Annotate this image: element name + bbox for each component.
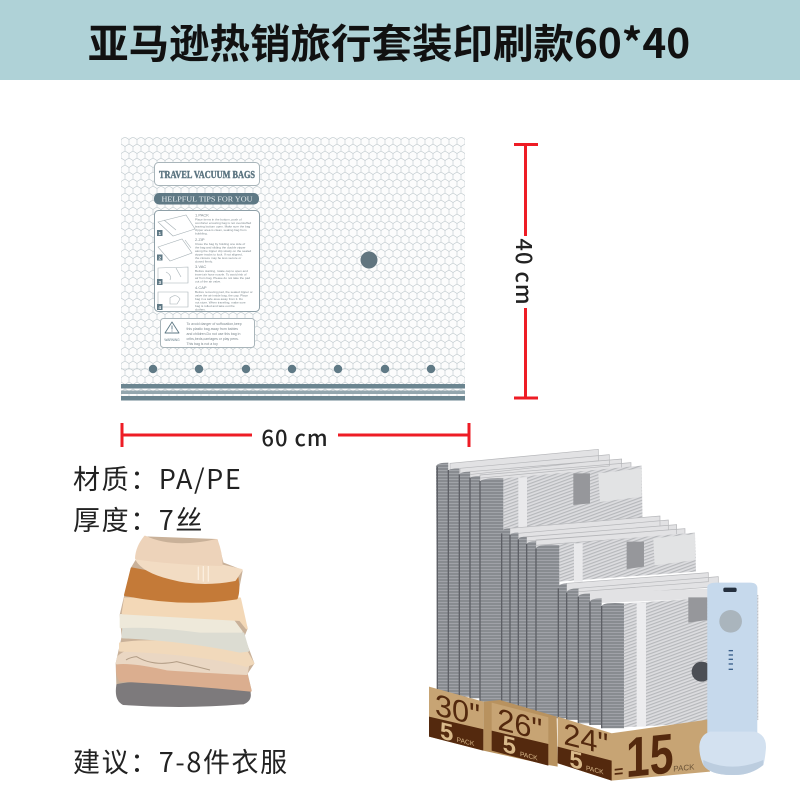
kraft box: 30 inch: 5 — [440, 718, 453, 748]
step number badges: 1 — [158, 231, 161, 236]
kraft box: 24 inch with total: 5 — [569, 746, 583, 776]
icon: warning triangle: WARNING — [164, 338, 180, 342]
step text: Place items in the bottom, push of — [195, 218, 242, 222]
step text: the bag and sliding the double zipper — [195, 246, 246, 250]
warning box — [160, 318, 254, 348]
step text: clothes. — [195, 308, 206, 312]
stack: 30 inch bags — [436, 449, 643, 702]
step markers row — [121, 365, 465, 373]
warning box: To avoid danger of suffocation,keep — [186, 322, 242, 326]
warning box: This bag is not a toy — [186, 342, 218, 346]
thickness text: 厚度：7丝 — [73, 499, 204, 538]
step text: bubbling. — [195, 232, 208, 236]
kraft box: 24 inch with total: PACK — [586, 765, 604, 776]
step text: out of the air valve. — [195, 280, 221, 284]
warning box: this plastic bag away from babies — [186, 327, 238, 331]
step text: 1.PACK — [195, 212, 209, 218]
step text: Close the bag by holding one side of — [195, 242, 245, 246]
step text: leaving bottom open. Make sure the bag — [195, 224, 250, 228]
valve — [360, 252, 378, 268]
vacuum bag printed artwork — [121, 137, 465, 400]
step number badges — [157, 230, 162, 310]
step number badges: 4 — [158, 305, 161, 310]
kraft box: 24 inch with total: 24" — [563, 716, 608, 762]
step text: Before starting, rotate cap to open and — [195, 269, 248, 273]
kraft box: 26 inch: 26" — [497, 702, 542, 747]
kraft box: 26 inch: PACK — [520, 751, 538, 762]
helpful tips banner: HELPFUL TIPS FOR YOU — [162, 194, 253, 204]
step text: not store. When traveling, make sure — [195, 300, 246, 304]
step text: air from bag, Please do not take the pad — [195, 276, 250, 280]
warning box: and children.Do not use this bag in — [186, 332, 240, 336]
stack: 24 inch bags — [558, 573, 758, 728]
kraft box: 30 inch: 30" — [435, 687, 480, 733]
height dimension: 40 cm — [509, 144, 541, 398]
step text: 4.CAP — [195, 285, 207, 290]
step text: bag in a safe area away from it. Do — [195, 297, 243, 301]
step text: valve the air inside bag, the cap. Place — [195, 294, 248, 298]
step text: zipper tracks to lock. If not aligned, — [195, 252, 243, 256]
instruction steps panel — [154, 210, 260, 312]
warning box: cribs,beds,carriages or play pens. — [186, 337, 239, 341]
bottom stripes — [121, 384, 465, 400]
advice text: 建议：7-8件衣服 — [73, 741, 289, 780]
step number badges: 2 — [158, 256, 161, 260]
header banner — [0, 0, 800, 80]
step text — [195, 212, 253, 312]
step text: along the zipper clip slowly on the sealed — [195, 249, 252, 253]
kraft box: 24 inch with total: = — [614, 762, 623, 781]
step text: 3.VAC — [195, 264, 206, 269]
kraft box: 26 inch — [492, 702, 548, 766]
folded clothes stack — [117, 537, 253, 706]
kraft box: 24 inch with total: PACK — [673, 762, 695, 774]
material text: 材质：PA/PE — [73, 458, 242, 497]
step text: Before removing pad, the sealed zipper or — [195, 290, 253, 294]
bag title box: TRAVEL VACUUM BAGS — [159, 170, 255, 181]
step text: insert air hose nozzle. To avoid risk of — [195, 272, 247, 276]
handheld vacuum pump — [699, 583, 766, 775]
product photo: bag sets and pump — [429, 449, 766, 790]
kraft box: 26 inch: 5 — [503, 731, 516, 761]
bag title box — [154, 162, 260, 186]
step text: the closure may be less secure or — [195, 256, 241, 260]
kraft box: 30 inch: PACK — [457, 737, 475, 748]
kraft box: 30 inch — [429, 687, 483, 751]
title: 亚马逊热销旅行套装印刷款60*40 — [88, 11, 690, 70]
stack: 26 inch bags — [501, 516, 696, 718]
step text: zipper area is clean, sealing bag from — [195, 228, 247, 232]
step text: closed firmly. — [195, 260, 213, 264]
helpful tips banner — [154, 193, 259, 204]
width dimension: 60 cm — [122, 421, 469, 453]
kraft box: 24 inch with total — [558, 716, 710, 790]
step text: comforter ensuring bag is not overstuffed — [195, 221, 251, 225]
step number badges: 3 — [158, 280, 161, 285]
step illustrations — [158, 215, 195, 307]
kraft box: 24 inch with total: 15 — [626, 722, 674, 790]
step text: bag is rolled and take out the — [195, 304, 235, 308]
width dimension: 60 cm: 60 cm — [261, 421, 329, 453]
step text: 2.ZIP — [195, 237, 205, 242]
kraft box: sides — [483, 700, 558, 767]
height dimension: 40 cm: 40 cm — [509, 238, 541, 306]
